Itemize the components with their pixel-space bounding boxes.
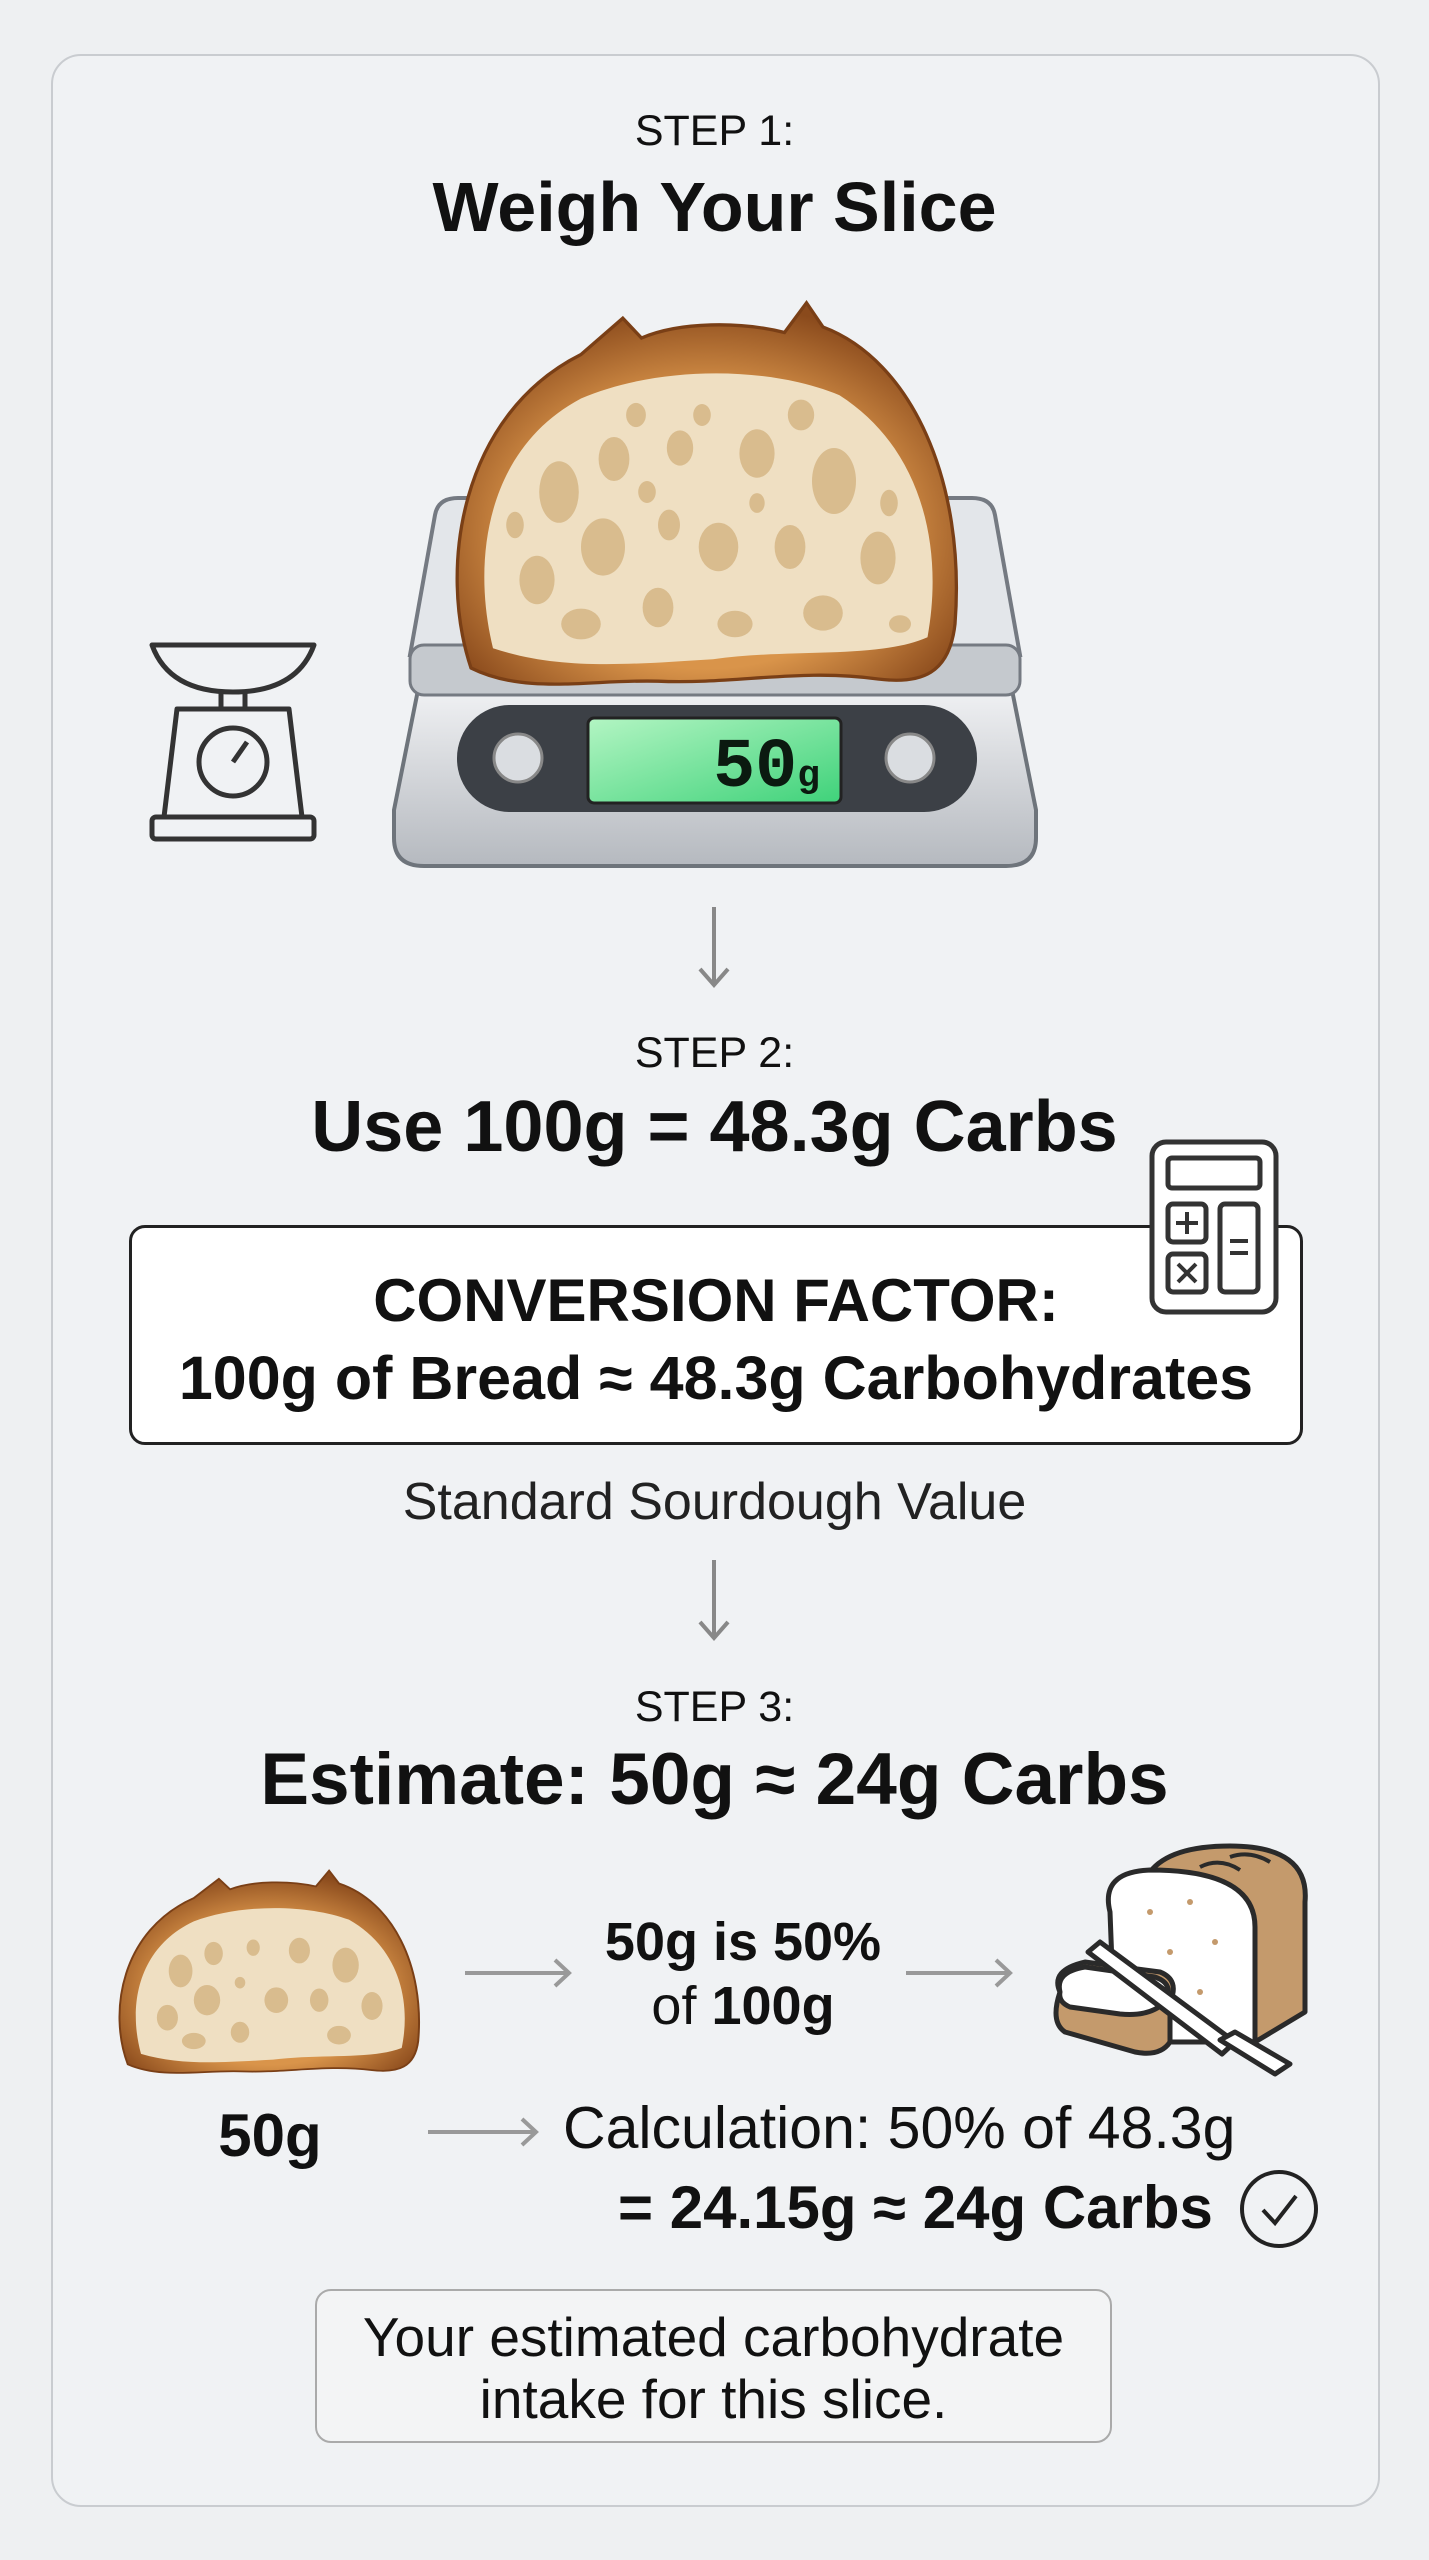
- icon: bread loaf with knife: [1054, 1844, 1308, 2076]
- illustration: bread on digital scale: [392, 300, 1038, 868]
- heading: step 3: STEP 3:: [635, 1683, 794, 1731]
- heading: step 1: STEP 1:: [635, 107, 794, 155]
- panel: conversion factor box: [129, 1225, 1303, 1445]
- text: conversion factor: CONVERSION FACTOR:: [373, 1267, 1059, 1334]
- platform: [410, 498, 1020, 655]
- text: 100g bread value: 100g of Bread ≈ 48.3g Carbohydrates: [179, 1344, 1253, 1412]
- scale base: [394, 680, 1036, 866]
- callout: estimated intake: [315, 2289, 1112, 2443]
- icon: kitchen scale outline: [150, 642, 316, 842]
- heading: step 2: STEP 2:: [635, 1029, 794, 1077]
- arrow: bread to percentage: [465, 1958, 572, 1988]
- title: conversion: Use 100g = 48.3g Carbs: [311, 1087, 1118, 1167]
- icon: calculator: [1150, 1140, 1278, 1314]
- callout: estimated intake: Your estimated carbohydrate: [363, 2306, 1064, 2368]
- bread slice: [457, 303, 956, 684]
- arrow: percentage to loaf: [906, 1958, 1013, 1988]
- arrow: step1 to step2: [698, 907, 730, 988]
- illustration: bread on digital scale: 50g: [713, 729, 820, 808]
- text: calculation: Calculation: 50% of 48.3g: [563, 2095, 1235, 2161]
- label: 50g: 50g: [218, 2102, 322, 2169]
- callout: estimated intake: intake for this slice.: [480, 2368, 947, 2430]
- text: 50g is 50% of 100g: 50g is 50%: [605, 1912, 881, 1972]
- text: result: = 24.15g ≈ 24g Carbs: [618, 2174, 1213, 2241]
- title: estimate: Estimate: 50g ≈ 24g Carbs: [260, 1739, 1169, 1820]
- title: weigh your slice: Weigh Your Slice: [432, 168, 997, 246]
- arrow: step2 to step3: [698, 1560, 730, 1641]
- display panel: [457, 705, 977, 812]
- illustration: small bread slice: [118, 1869, 420, 2074]
- text: 50g is 50% of 100g: [605, 1912, 881, 2036]
- text: standard sourdough value: Standard Sourdough Value: [403, 1473, 1026, 1531]
- text: 50g is 50% of 100g: of 100g: [651, 1976, 835, 2036]
- icon: check circle: [1240, 2170, 1318, 2248]
- arrow: 50g to calculation: [428, 2118, 539, 2146]
